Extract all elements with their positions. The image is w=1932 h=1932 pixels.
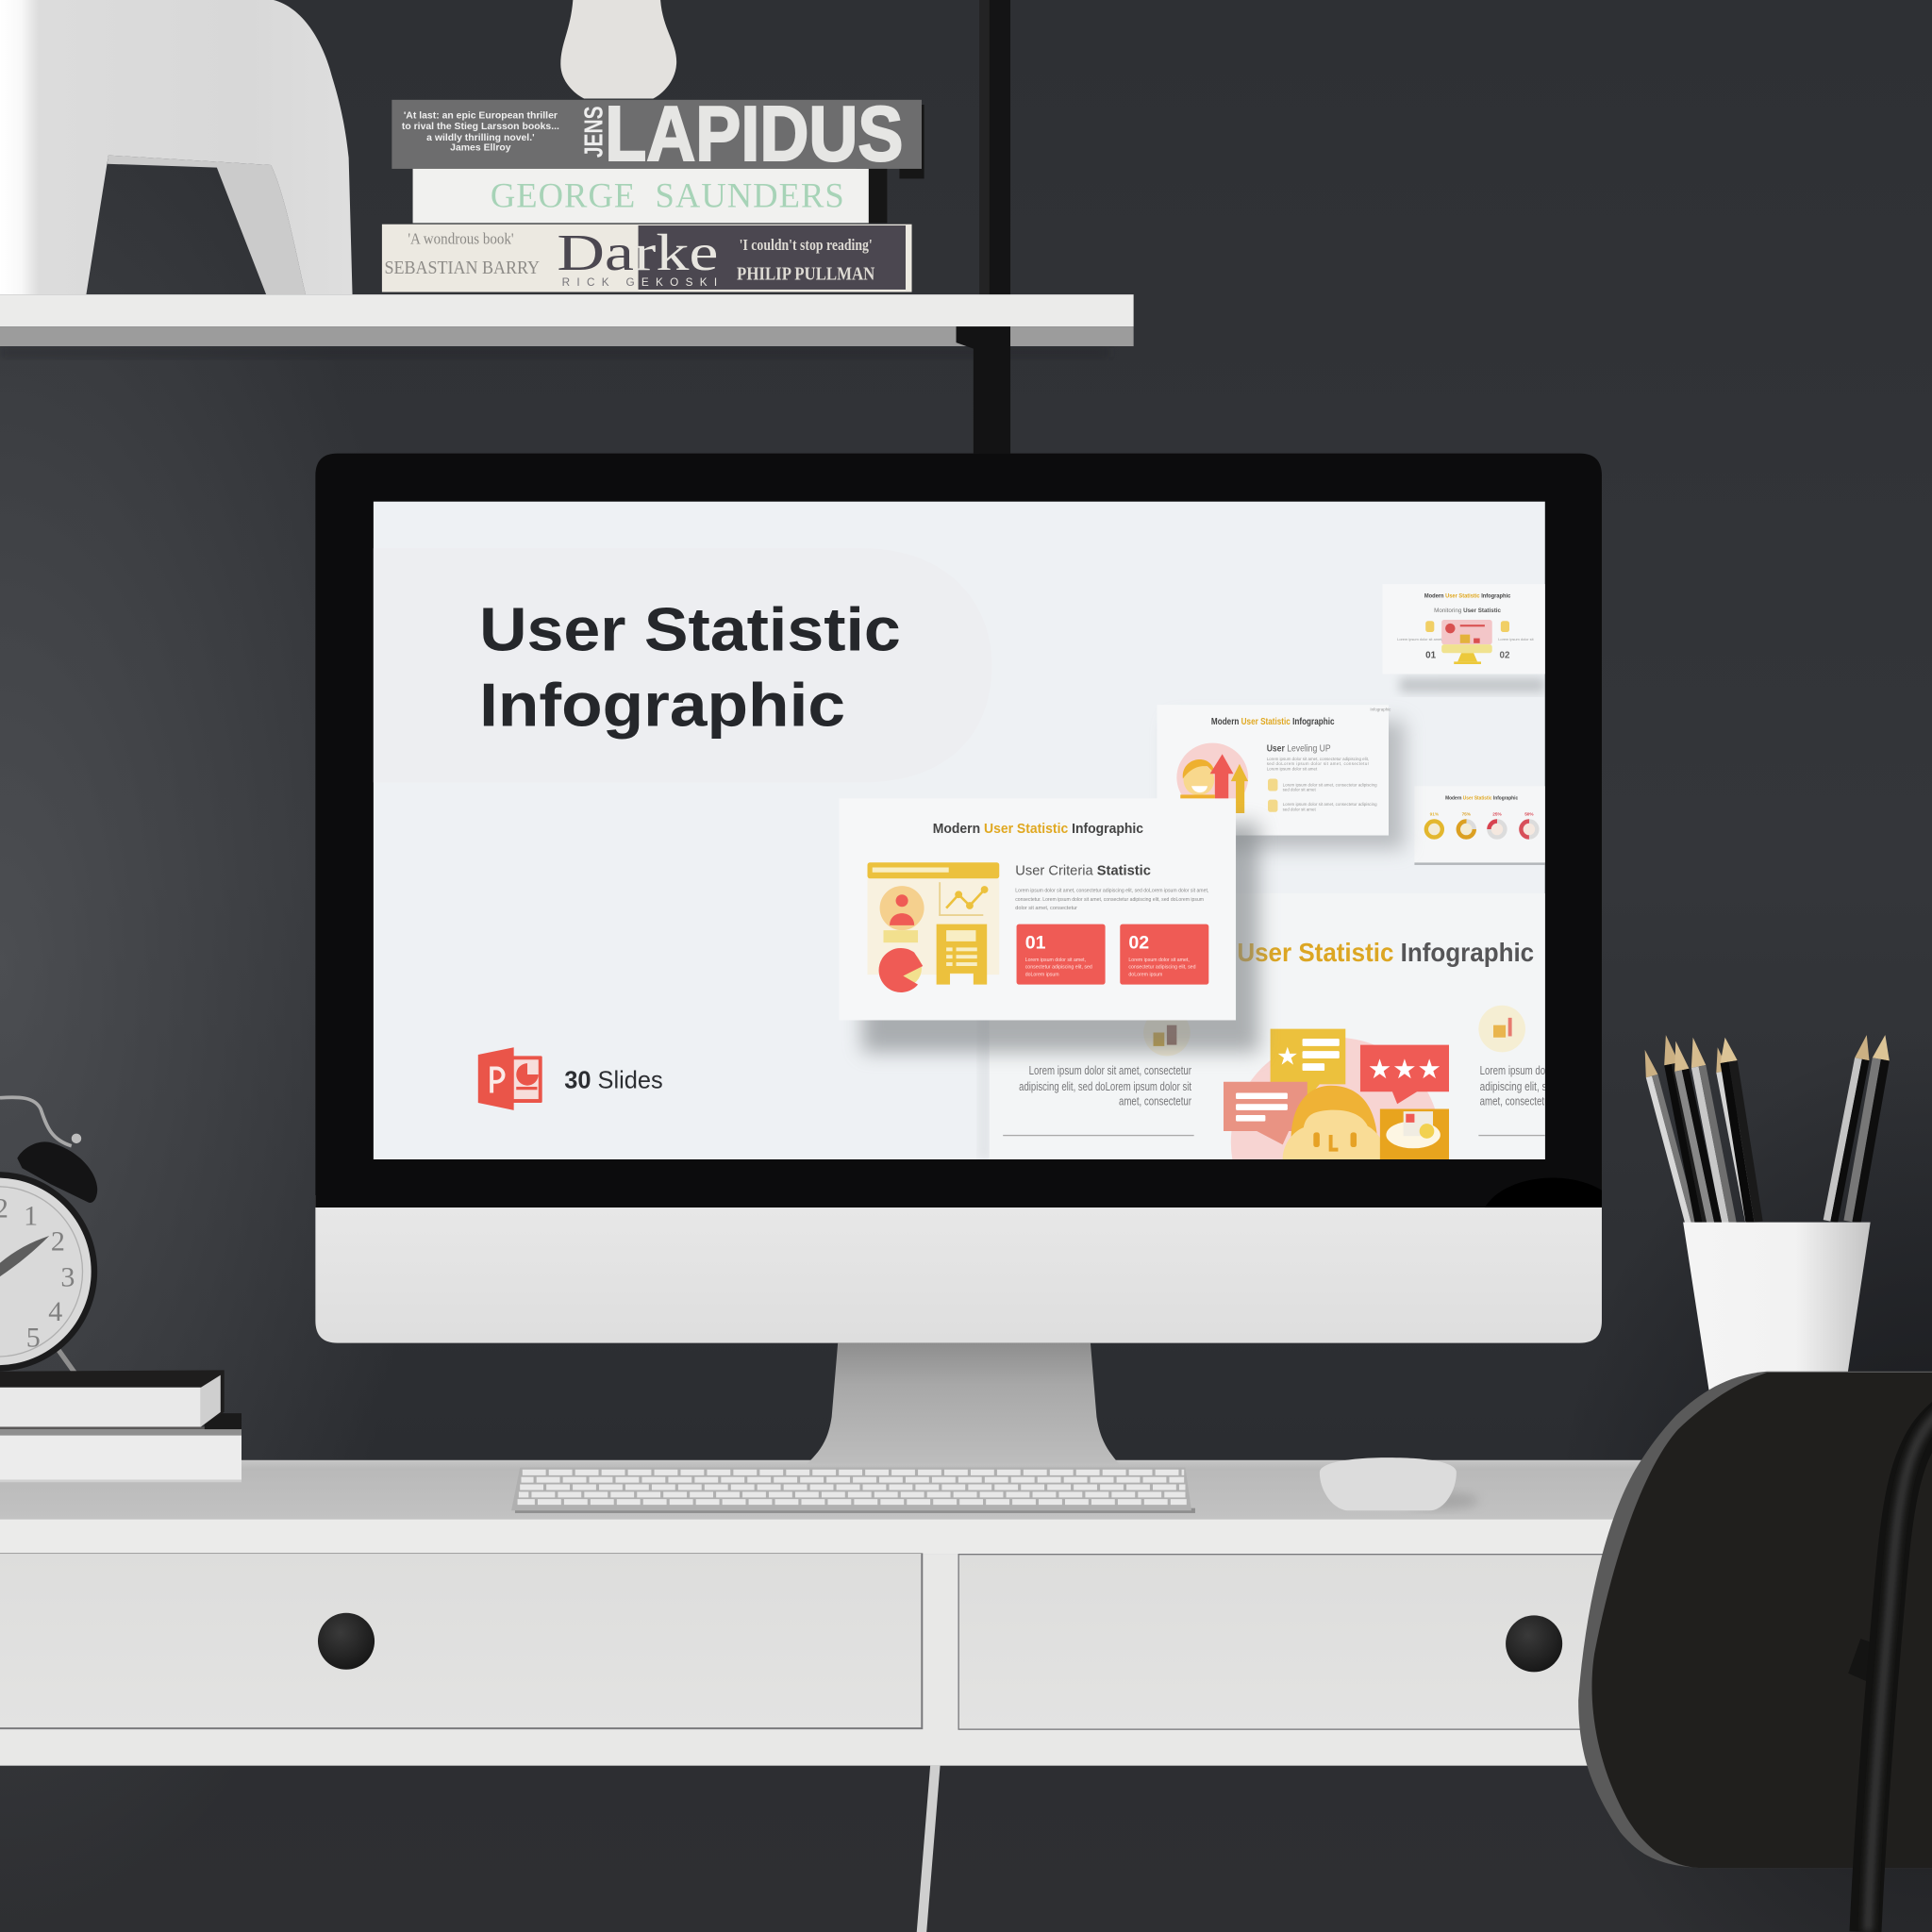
- card 01: Lorem ipsum dolor sit amet,: [1025, 958, 1086, 963]
- right text block: amet, consectetur: [1480, 1095, 1553, 1108]
- text lines: sed dolor sit amet: [1283, 807, 1316, 811]
- illustration: levelling up: [1176, 743, 1248, 813]
- book: Lapidus: a wildly thrilling novel.': [426, 133, 535, 143]
- left knob: [318, 1613, 375, 1670]
- book: Darke: Da rke: [557, 224, 718, 281]
- right drawer: [958, 1554, 1603, 1730]
- sub heading: User Criteria Statistic: [1015, 863, 1151, 878]
- book: Lapidus: to rival the Stieg Larsson books...: [402, 122, 559, 132]
- slide count: 30 Slides: [564, 1065, 663, 1093]
- card 01: [1017, 924, 1106, 985]
- mini slide: leveling up: Infographic: [1370, 708, 1391, 712]
- book: Darke: RICK G EKOSKI: [562, 276, 717, 289]
- pencil group left: [1639, 1034, 1763, 1226]
- donut: 1: 91%: [1430, 812, 1440, 817]
- book: Darke: SEBASTIAN BARRY: [385, 258, 540, 278]
- clock face: 2: [51, 1226, 65, 1257]
- chair back: [1578, 1372, 1932, 1868]
- title: Infographic: [479, 670, 845, 739]
- mini slide: monitoring: Modern User Statistic Infographic: [1424, 593, 1511, 599]
- clock knob: [72, 1134, 81, 1143]
- heading: user leveling up: User Leveling UP: [1267, 744, 1331, 755]
- text lines: Lorem ipsum dolor sit amet, consectetur adipiscing: [1283, 802, 1377, 807]
- left text block: amet, consectetur: [1119, 1095, 1191, 1108]
- left text block: adipiscing elit, sed doLorem ipsum dolor sit: [1019, 1080, 1191, 1093]
- card 02: Lorem ipsum dolor sit amet,: [1128, 958, 1190, 963]
- book: George Saunders: [413, 169, 887, 223]
- desk leg: [917, 1766, 941, 1932]
- body lines: [1015, 889, 1209, 911]
- text lines: sed doLorem ipsum dolor sit amet, consectetur: [1267, 761, 1370, 766]
- icon: right circle: [1478, 1006, 1525, 1052]
- mini slide: donuts: [1414, 786, 1545, 865]
- pencil cup: [1683, 1223, 1871, 1398]
- text lines: Lorem ipsum dolor sit amet: [1267, 766, 1318, 771]
- bezel dark reflection: [1485, 1178, 1602, 1208]
- pencil group right: [1824, 1034, 1893, 1224]
- mini slide: monitoring: 02: [1500, 650, 1510, 660]
- desk rail and post: [0, 1554, 1602, 1766]
- mini slide: monitoring: Lorem ipsum dolor sit amet,: [1397, 637, 1442, 641]
- lower book: [0, 1413, 242, 1482]
- icon: monitor: [1441, 620, 1492, 664]
- right text block: Lorem ipsum dolor sit amet, consectetur: [1480, 1064, 1642, 1077]
- clock face: 5: [26, 1323, 41, 1354]
- right text block: [1478, 1066, 1545, 1136]
- book: Lapidus: JENS: [579, 106, 608, 158]
- bubble: lines: [1224, 1082, 1307, 1144]
- donut: 2: 75%: [1462, 812, 1472, 817]
- monitor stand: [808, 1343, 1119, 1464]
- left drawer: [0, 1553, 923, 1729]
- book: Darke: [382, 224, 912, 292]
- icon: left circle: [1143, 1021, 1191, 1057]
- illustration: user dashboard: [868, 862, 999, 992]
- mini slide: donuts: Modern User Statistic Infographic: [1445, 796, 1518, 802]
- bubble: three stars: [1360, 1045, 1449, 1104]
- card 02: 02: [1128, 933, 1149, 954]
- book: Lapidus: James Ellroy: [450, 142, 511, 153]
- monitor bezel: [315, 454, 1602, 1208]
- bubble: three stars: ★★★: [1368, 1055, 1441, 1085]
- card 01: consectetur adipiscing elit, sed: [1025, 965, 1092, 971]
- book: Lapidus: [391, 92, 924, 178]
- mini slide: user criteria: [839, 798, 1259, 1052]
- monitor: [315, 454, 1642, 1343]
- mini slide: leveling up: Modern User Statistic Infographic: [1211, 717, 1335, 727]
- desk top surface: [0, 1460, 1651, 1519]
- card 02: doLorem ipsum: [1128, 972, 1162, 977]
- mini slide: leveling up: [1157, 705, 1405, 849]
- title: User Statistic: [479, 595, 901, 664]
- large background slide: [979, 893, 1545, 1159]
- books under clock: [0, 1370, 242, 1482]
- title blob: [374, 548, 375, 783]
- clock face: 4: [48, 1296, 62, 1327]
- text lines: Lorem ipsum dolor sit amet, consectetur adipiscing: [1283, 782, 1377, 787]
- mini slide: monitoring: Lorem ipsum dolor sit: [1498, 637, 1534, 641]
- white vase: [560, 0, 676, 98]
- text lines: Lorem ipsum dolor sit amet, consectetur adipiscing elit,: [1267, 757, 1369, 761]
- keyboard: [511, 1468, 1195, 1513]
- clock bell: [17, 1141, 97, 1203]
- alarm clock: [0, 1097, 242, 1482]
- shelf strap: [979, 0, 1010, 454]
- shelf bracket: [957, 326, 1010, 454]
- text lines: sed dolor sit amet: [1283, 788, 1316, 792]
- card 01: 01: [1025, 933, 1046, 954]
- right knob: [1506, 1615, 1562, 1672]
- card 02: [1120, 924, 1208, 985]
- screen slide: [374, 502, 1545, 1159]
- upper book: [0, 1370, 225, 1429]
- book: Darke: 'A wondrous book': [408, 230, 514, 248]
- title: [479, 595, 901, 739]
- left text block: [1003, 1064, 1194, 1136]
- clock face: 1: [24, 1200, 38, 1231]
- desk front: [0, 1519, 1651, 1554]
- bubble: star: ★: [1276, 1041, 1299, 1070]
- body lines: Lorem ipsum dolor sit amet, consectetur adipiscing elit, sed doLorem ipsum dolor sit amet,: [1015, 889, 1209, 894]
- book: Darke: PHILIP PULLMAN: [737, 264, 874, 284]
- mini slide: monitoring: Monitoring User Statistic: [1434, 608, 1502, 614]
- body lines: dolor sit amet, consectetur: [1015, 906, 1077, 911]
- desk: [0, 1460, 1651, 1932]
- monitor chin: [315, 1195, 1602, 1343]
- mouse: [1320, 1457, 1478, 1510]
- chair leg: [1865, 1408, 1932, 1932]
- card 02: consectetur adipiscing elit, sed: [1128, 965, 1196, 971]
- book: George Saunders: GEORGE SAUNDERS: [491, 175, 844, 214]
- mini slide: monitoring: 01: [1425, 650, 1437, 660]
- illustration: levelling up: Infographic: [1205, 807, 1230, 812]
- donut: 4: 50%: [1524, 812, 1534, 817]
- character: [1283, 1086, 1388, 1159]
- chair strap: [1848, 1639, 1897, 1690]
- clock foot: [58, 1349, 76, 1375]
- right text block: adipiscing elit, sed doLorem ipsum: [1480, 1080, 1625, 1093]
- book: Lapidus: 'At last: an epic European thriller: [404, 110, 558, 121]
- book: Lapidus: LAPIDUS: [605, 92, 903, 177]
- bubble: star: [1271, 1029, 1345, 1096]
- body lines: consectetur. Lorem ipsum dolor sit amet, consectetur adipiscing elit, sed doLorem ipsum: [1015, 897, 1204, 903]
- bubble: document: [1380, 1109, 1449, 1159]
- chair: [1578, 1372, 1932, 1932]
- clock face: [0, 1172, 97, 1372]
- left text block: Lorem ipsum dolor sit amet, consectetur: [1029, 1064, 1191, 1077]
- book stack: [382, 92, 924, 292]
- book: Darke: 'I couldn't stop reading': [740, 236, 873, 254]
- card 01: doLorem ipsum: [1025, 972, 1059, 977]
- mini slide: monitoring: [1382, 584, 1545, 692]
- pencils: [1639, 1034, 1893, 1226]
- wall shelf: [0, 294, 1134, 358]
- illustration: reviews: [1224, 1028, 1449, 1159]
- text lines: [1267, 757, 1377, 811]
- large background slide: User Statistic Infographic: [1237, 938, 1534, 967]
- donut: 3: 25%: [1492, 812, 1502, 817]
- clock face: 3: [60, 1262, 75, 1293]
- white elephant figurine: [0, 0, 353, 294]
- icon: PowerPoint: [478, 1047, 542, 1110]
- slide heading: Modern User Statistic Infographic: [933, 822, 1143, 837]
- clock bell handle: [0, 1097, 72, 1146]
